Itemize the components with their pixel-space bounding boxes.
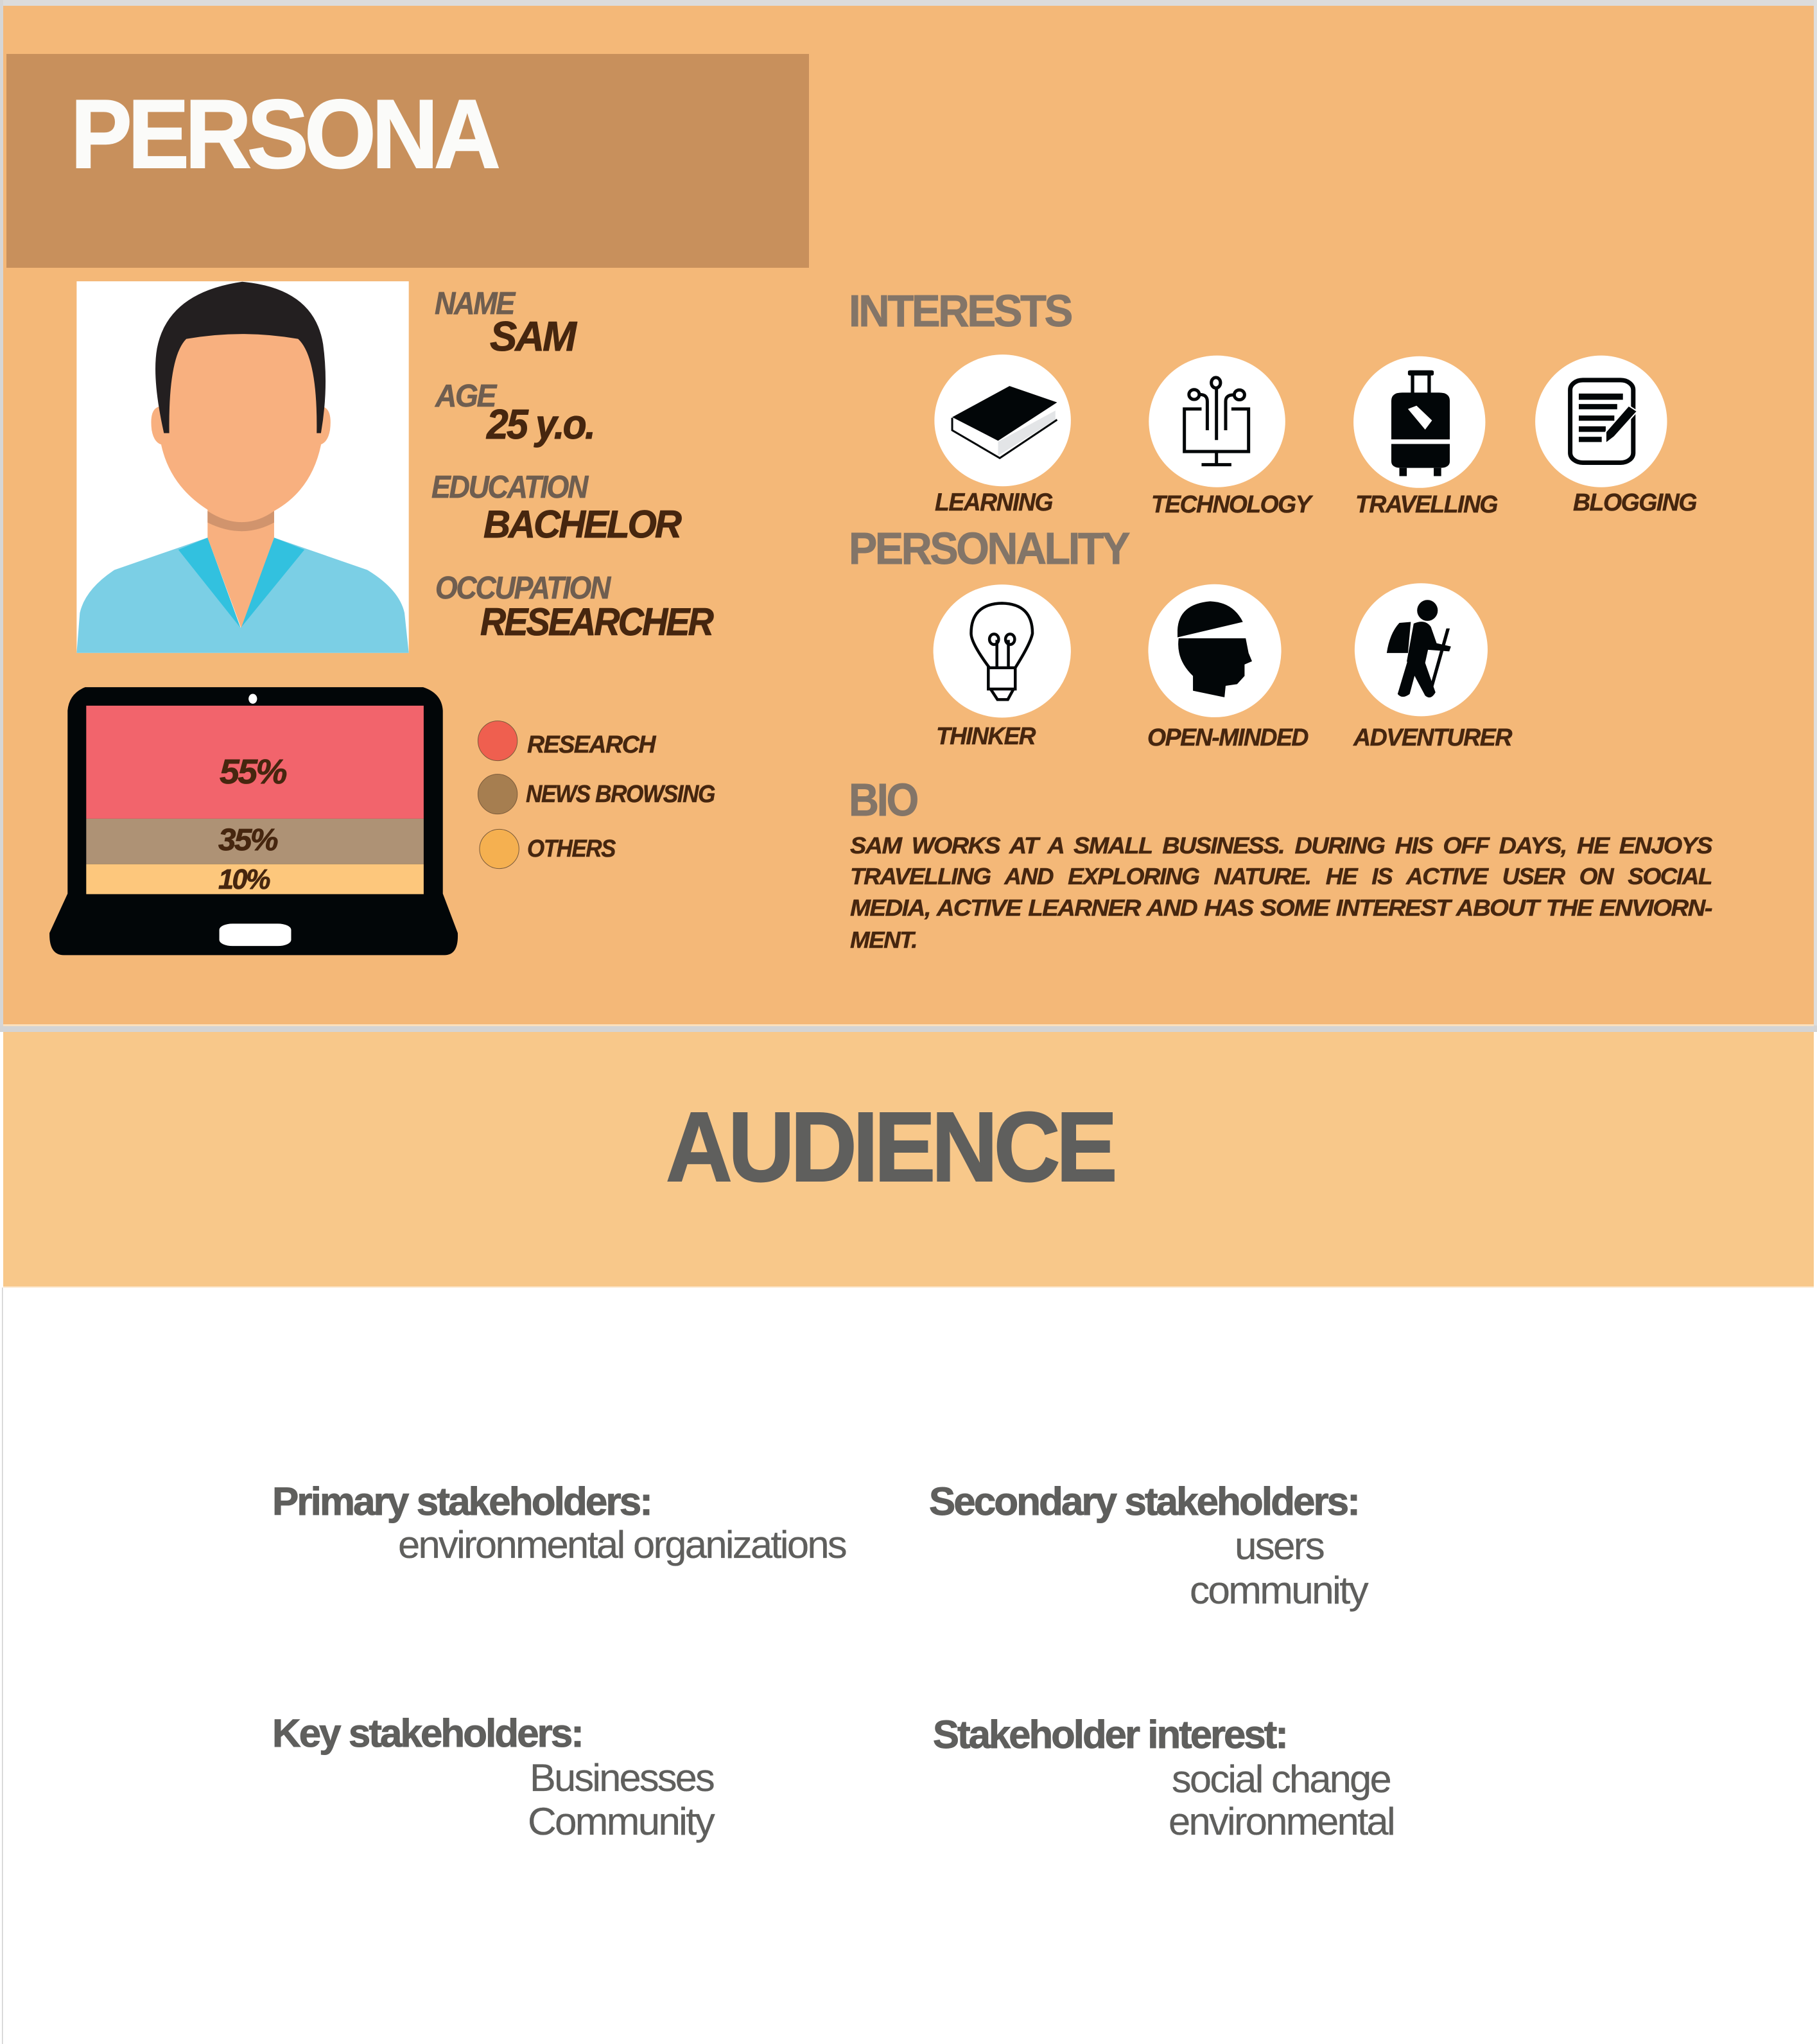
age label: AGE — [435, 379, 498, 414]
bio text — [850, 832, 1713, 953]
bio text: TRAVELLING AND EXPLORING NATURE. HE IS ACTIVE USER ON SOCIAL — [850, 863, 1712, 889]
title: AUDIENCE: AUDIENCE — [666, 1092, 1114, 1202]
caption: technology: TECHNOLOGY — [1151, 491, 1314, 518]
shirt — [76, 537, 409, 653]
icon: adventurer hiker — [1355, 583, 1488, 716]
block: key stakeholders: Key stakeholders: — [272, 1711, 582, 1755]
heading: bio: BIO — [849, 775, 917, 826]
age value: 25 y.o. — [485, 401, 594, 448]
block: stakeholder interest — [933, 1713, 1394, 1843]
legend dots — [478, 721, 519, 869]
collar — [178, 537, 304, 628]
caption: adventurer: ADVENTURER — [1353, 724, 1513, 751]
block: secondary stakeholders: Secondary stakeholders: — [929, 1480, 1359, 1523]
block: primary stakeholders — [272, 1480, 846, 1566]
icon: technology — [1149, 356, 1285, 487]
bio text: SAM WORKS AT A SMALL BUSINESS. DURING HIS OFF DAYS, HE ENJOYS — [850, 832, 1713, 859]
caption: open-minded: OPEN-MINDED — [1147, 724, 1308, 751]
block: key stakeholders: Businesses — [530, 1756, 714, 1799]
caption: blogging: BLOGGING — [1573, 489, 1697, 516]
banner with title — [6, 54, 809, 268]
block: key stakeholders — [272, 1711, 715, 1843]
occupation value: RESEARCHER — [480, 600, 713, 643]
value 35%: 35% — [218, 823, 278, 857]
block: primary stakeholders: environmental organizations — [398, 1523, 846, 1566]
value 55%: 55% — [220, 753, 287, 791]
icon: open-minded head — [1148, 584, 1282, 717]
panel: persona — [3, 6, 1814, 1026]
name label: NAME — [435, 286, 516, 321]
panel: audience header — [3, 1032, 1814, 1288]
icon: blogging notebook — [1535, 356, 1667, 487]
value 10%: 10% — [218, 864, 270, 895]
hair — [155, 282, 326, 433]
block: primary stakeholders: Primary stakeholders: — [272, 1480, 651, 1523]
education label: EDUCATION — [431, 470, 589, 505]
block: secondary stakeholders: community — [1190, 1569, 1369, 1612]
heading: personality: PERSONALITY — [849, 523, 1130, 573]
block: stakeholder interest: environmental — [1169, 1800, 1394, 1843]
legend: research: RESEARCH — [527, 731, 657, 758]
legend: others: OTHERS — [527, 835, 616, 862]
ears — [151, 406, 331, 445]
title: PERSONA: PERSONA — [71, 80, 498, 189]
block: secondary stakeholders — [929, 1480, 1369, 1612]
name value: SAM — [490, 313, 578, 360]
heading: interests: INTERESTS — [849, 286, 1072, 336]
icon: thinker bulb — [934, 584, 1071, 717]
laptop body — [49, 687, 458, 955]
legend: news browsing: NEWS BROWSING — [526, 781, 715, 808]
block: stakeholder interest: social change — [1172, 1758, 1390, 1801]
block: key stakeholders: Community — [528, 1800, 715, 1843]
caption: learning: LEARNING — [935, 489, 1053, 516]
occupation label: OCCUPATION — [435, 571, 612, 606]
legend — [478, 721, 715, 869]
icon: travelling suitcase — [1353, 356, 1485, 488]
caption: travelling: TRAVELLING — [1355, 491, 1498, 518]
neck — [207, 494, 274, 628]
block: secondary stakeholders: users — [1235, 1524, 1324, 1568]
portrait photo — [76, 281, 409, 653]
block: stakeholder interest: Stakeholder interest: — [933, 1713, 1287, 1756]
bio text: MEDIA, ACTIVE LEARNER AND HAS SOME INTEREST ABOUT THE ENVIORN- — [850, 895, 1712, 921]
icon: learning book — [934, 354, 1071, 486]
caption: thinker: THINKER — [936, 723, 1036, 750]
laptop usage chart — [49, 687, 458, 955]
bio text: MENT. — [850, 927, 917, 953]
face — [161, 333, 321, 519]
education value: BACHELOR — [483, 503, 682, 546]
